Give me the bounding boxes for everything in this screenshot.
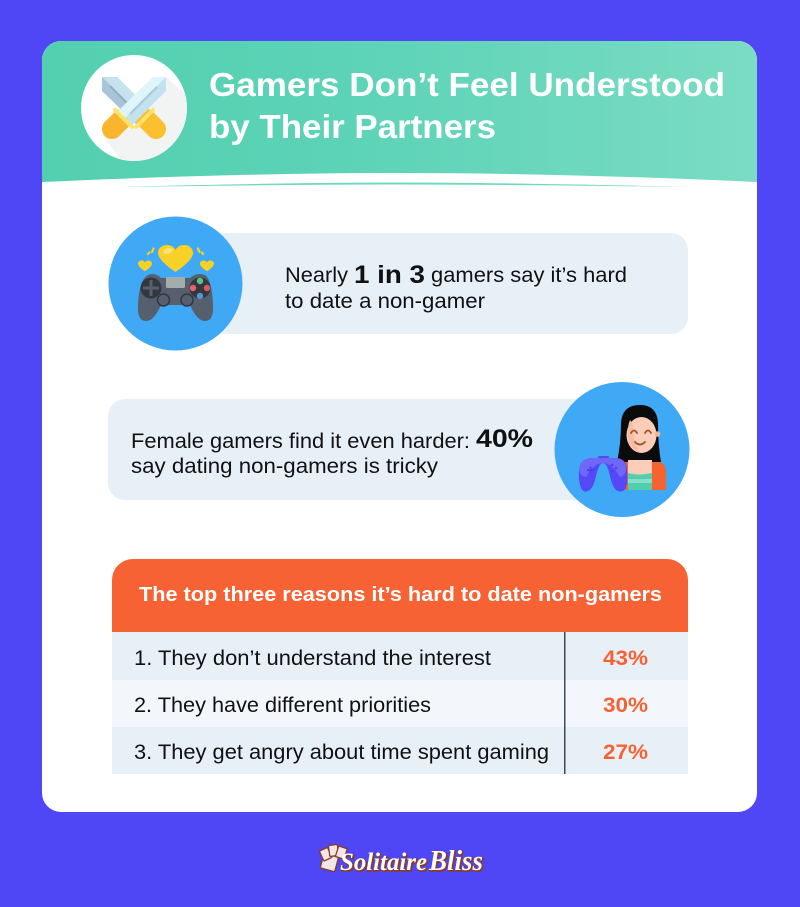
table row 1: 1. They don’t understand the interest <box>134 647 491 670</box>
title: by Their Partners <box>209 108 496 145</box>
text: stat 1 in 3: Nearly <box>285 264 349 287</box>
panel: main card <box>42 41 757 812</box>
logo: Solitaire Bliss <box>319 844 484 878</box>
table row 1 <box>112 632 688 680</box>
logo: Solitaire Bliss: Solitaire <box>340 849 427 876</box>
text: stat 1 in 3: 1 in 3 <box>354 261 425 289</box>
panel: reasons table <box>112 559 688 774</box>
icon: crossed swords <box>81 55 192 165</box>
logo: Solitaire Bliss: Solitaire <box>341 850 428 877</box>
icon: controller with hearts <box>108 216 242 350</box>
text: stat 40%: Female gamers find it even harder: <box>131 430 470 453</box>
table row 3 <box>112 727 688 774</box>
panel: stat 40% <box>108 399 622 500</box>
icon: woman with controller <box>554 382 690 517</box>
panel: stat 1 in 3 <box>175 233 688 334</box>
text: stat 1 in 3: to date a non-gamer <box>285 290 485 313</box>
table heading <box>112 559 688 632</box>
title <box>209 66 725 145</box>
logo: Solitaire Bliss: Bliss <box>429 846 484 878</box>
table row 2: 2. They have different priorities <box>134 694 431 717</box>
title: Gamers Don’t Feel Understood <box>209 66 725 103</box>
table row 2: 30% <box>603 694 648 717</box>
table row 3: 3. They get angry about time spent gaming <box>134 741 549 764</box>
table row 2 <box>112 680 688 727</box>
table row 3: 27% <box>603 741 648 764</box>
text: stat 40%: 40% <box>476 425 533 453</box>
table row 1: 43% <box>603 647 648 670</box>
panel: header band <box>42 41 757 182</box>
logo: Solitaire Bliss: Bliss <box>428 845 483 877</box>
table heading: The top three reasons it’s hard to date non-gamers <box>139 584 662 606</box>
text: stat 40% <box>131 425 533 478</box>
text: stat 1 in 3 <box>285 261 627 313</box>
text: stat 40%: say dating non-gamers is tricky <box>131 455 439 478</box>
text: stat 1 in 3: gamers say it’s hard <box>431 264 627 287</box>
